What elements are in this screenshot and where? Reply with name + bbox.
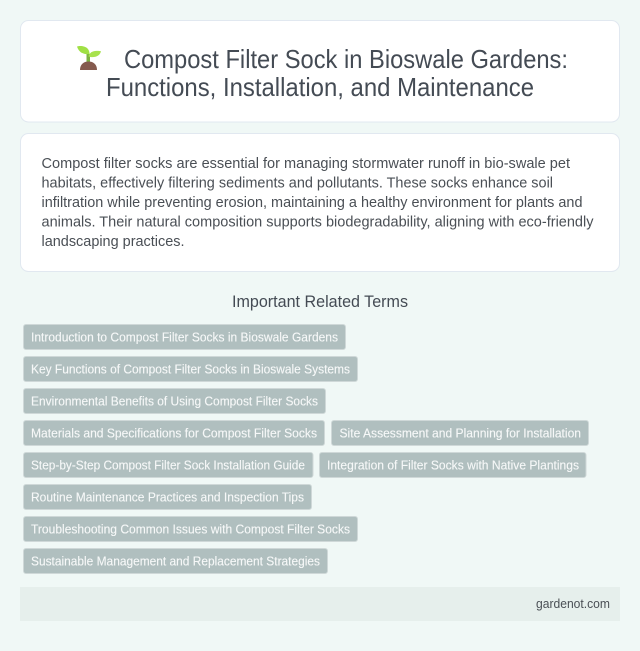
- title: [106, 44, 568, 102]
- tag: [24, 452, 313, 478]
- tag: [24, 324, 346, 350]
- title: Compost Filter Sock in Bioswale Gardens:: [124, 44, 568, 74]
- panel: title card: [20, 20, 620, 122]
- text block: description: landscaping practices.: [42, 233, 184, 250]
- text block: description: Compost filter socks are essential for managing stormwater runoff in bio-swale pet: [42, 155, 571, 172]
- tag: Integration of Filter Socks with Native Plantings: [327, 458, 579, 472]
- tag: [24, 484, 312, 510]
- tag: Site Assessment and Planning for Installation: [340, 426, 581, 440]
- tag: [24, 548, 328, 574]
- title: Functions, Installation, and Maintenance: [106, 72, 534, 102]
- tag: Troubleshooting Common Issues with Compost Filter Socks: [31, 522, 350, 536]
- tag: Sustainable Management and Replacement Strategies: [31, 554, 320, 568]
- tag: [24, 388, 326, 414]
- text block: description: habitats, effectively filtering sediments and pollutants. These socks enhance soil: [42, 174, 553, 192]
- tag: Introduction to Compost Filter Socks in Bioswale Gardens: [31, 330, 338, 344]
- tag list: related terms: [24, 324, 588, 574]
- heading: related terms: Important Related Terms: [232, 293, 408, 311]
- tag: Environmental Benefits of Using Compost Filter Socks: [31, 394, 318, 408]
- tag: [24, 516, 358, 542]
- tag: [332, 420, 588, 446]
- text block: description: infiltration while preventing erosion, maintaining a healthy environment for plants and: [42, 194, 582, 211]
- tag: Materials and Specifications for Compost Filter Socks: [31, 426, 317, 440]
- tag: [24, 356, 358, 382]
- tag: Routine Maintenance Practices and Inspection Tips: [31, 490, 304, 504]
- tag: Key Functions of Compost Filter Socks in Bioswale Systems: [31, 362, 350, 376]
- panel: description: [20, 134, 620, 272]
- tag: Step-by-Step Compost Filter Sock Installation Guide: [31, 458, 305, 472]
- icon: seedling: [77, 46, 101, 70]
- text block: description: animals. Their natural composition supports biodegradability, aligning with eco-friendly: [42, 214, 594, 230]
- tag: [320, 452, 586, 478]
- footer: gardenot.com: [536, 596, 610, 611]
- footer: [20, 587, 620, 621]
- text block: description: [42, 155, 594, 250]
- tag: [24, 420, 324, 446]
